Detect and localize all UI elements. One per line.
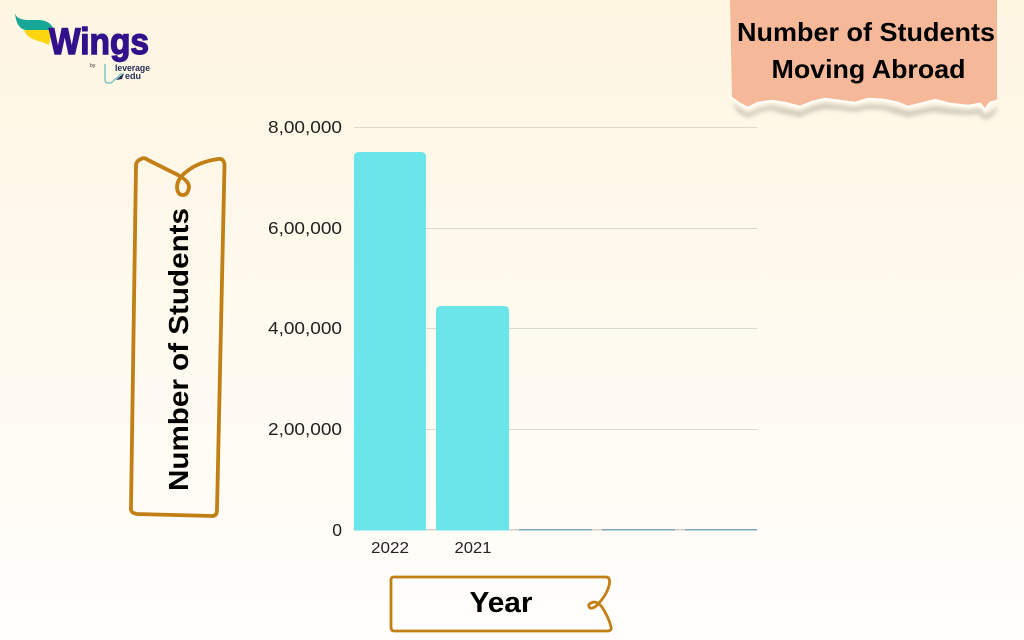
grid lines: [354, 128, 757, 430]
y-axis labels: [268, 117, 342, 540]
y-axis labels: 2,00,000: [268, 419, 342, 439]
y-axis labels: 0: [332, 520, 342, 540]
logo byline: by: [90, 63, 96, 69]
x-axis title: Year: [470, 587, 532, 619]
x-axis labels: [371, 540, 492, 557]
logo byline: edu: [125, 71, 141, 81]
y-axis labels: 4,00,000: [268, 318, 342, 338]
title text: Moving Abroad: [772, 54, 966, 84]
y-axis labels: 8,00,000: [268, 117, 342, 137]
logo byline: leverage: [115, 63, 150, 73]
tag outline: [391, 577, 611, 631]
icon: wing: [15, 13, 54, 45]
y-axis labels: 6,00,000: [268, 218, 342, 238]
title text: [737, 17, 995, 84]
x-axis labels: 2022: [371, 540, 409, 557]
x-axis labels: 2021: [454, 540, 492, 557]
tag outline: [131, 158, 224, 516]
logo byline: [90, 63, 150, 83]
panel: y-axis label tag: [131, 158, 224, 516]
logo wordmark: Wings: [49, 21, 149, 62]
y-axis title: Number of Students: [163, 208, 194, 491]
bar: 2022: [354, 152, 426, 530]
logo: Wings by leverage edu: [15, 13, 150, 83]
bar: 2021: [436, 306, 509, 530]
baseline: [354, 529, 757, 530]
bar chart: [268, 117, 757, 557]
panel: torn paper title: [730, 0, 997, 120]
title text: Number of Students: [737, 17, 995, 47]
panel: x-axis label tag: [391, 577, 611, 631]
